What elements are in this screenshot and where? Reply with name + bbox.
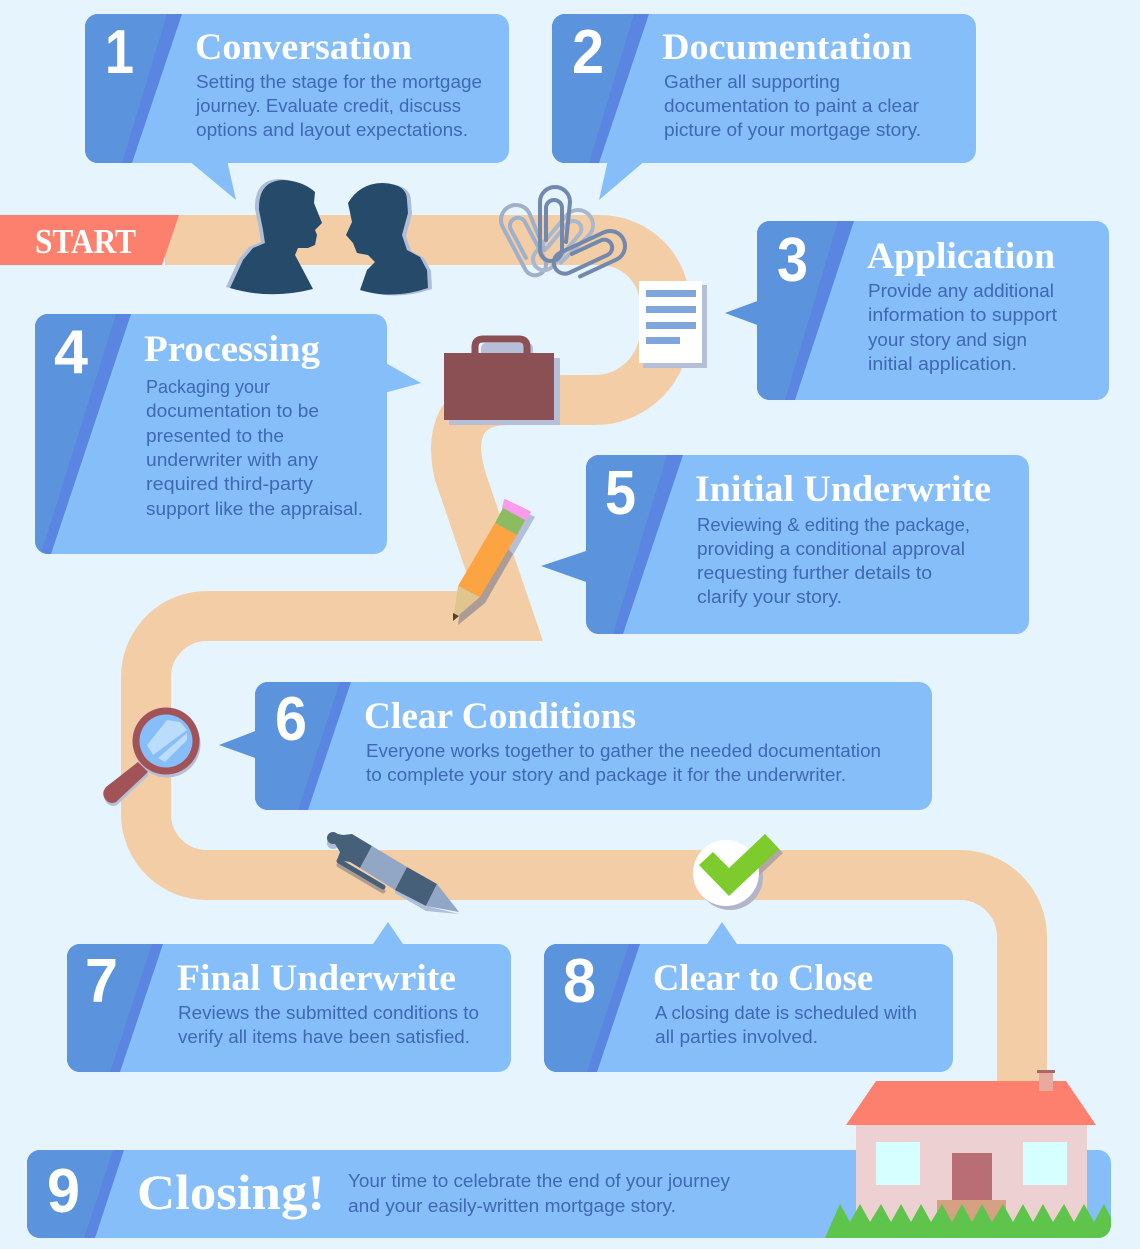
text: closing description xyxy=(348,1170,731,1216)
text: documentation description: documentation to paint a clear xyxy=(664,95,919,116)
journey path xyxy=(146,240,1022,1095)
text: clear conditions description: to complete your story and package it for the underwriter. xyxy=(366,764,846,785)
icon: pencil xyxy=(453,500,535,625)
text: clear conditions description: Everyone works together to gather the needed documentation xyxy=(366,740,881,761)
number 2: 2 xyxy=(572,18,604,87)
text: clear to close description: A closing date is scheduled with xyxy=(655,1002,917,1023)
text: conversation description: options and layout expectations. xyxy=(196,119,468,140)
text: application description: initial application. xyxy=(868,353,1017,374)
text: documentation description: picture of your mortgage story. xyxy=(664,119,921,140)
icon: house xyxy=(825,1070,1111,1238)
grass xyxy=(825,1204,1111,1238)
text: closing description: and your easily-written mortgage story. xyxy=(348,1195,676,1216)
text: conversation description: Setting the stage for the mortgage xyxy=(196,71,482,92)
panel: step 1 conversation xyxy=(85,14,509,200)
text: final underwrite description: verify all items have been satisfied. xyxy=(178,1026,470,1047)
number 7: 7 xyxy=(85,947,118,1016)
icon: briefcase xyxy=(444,339,560,425)
text: application description: your story and sign xyxy=(868,329,1027,350)
text: processing description xyxy=(146,376,363,519)
icon: two people in conversation xyxy=(226,179,432,296)
panel: step 3 application xyxy=(725,221,1109,400)
panel: step 5 initial underwrite xyxy=(541,455,1029,634)
icon: magnifying glass xyxy=(103,708,200,806)
icon: check mark xyxy=(693,834,783,910)
text: initial underwrite description: providing a conditional approval xyxy=(697,538,965,559)
text: clear to close description: all parties involved. xyxy=(655,1026,818,1047)
panel: step 6 clear conditions xyxy=(219,682,932,810)
start label: START xyxy=(35,222,136,261)
text: documentation description: Gather all supporting xyxy=(664,71,840,92)
number 1: 1 xyxy=(105,18,134,87)
heading: processing: Processing xyxy=(144,329,321,370)
text: final underwrite description xyxy=(178,1002,479,1047)
text: processing description: required third-party xyxy=(146,473,314,494)
number 9: 9 xyxy=(47,1157,80,1226)
heading: application: Application xyxy=(867,236,1055,277)
panel: step 7 final underwrite xyxy=(67,922,511,1072)
text: initial underwrite description: Reviewing & editing the package, xyxy=(697,514,970,535)
number 5: 5 xyxy=(605,459,636,528)
panel: step 8 clear to close xyxy=(544,922,953,1072)
text: application description xyxy=(868,280,1057,374)
panel: step 4 processing xyxy=(35,314,421,554)
text: initial underwrite description: clarify your story. xyxy=(697,586,842,607)
text: processing description: support like the appraisal. xyxy=(146,498,363,519)
icon: pen xyxy=(327,832,459,914)
text: initial underwrite description: requesting further details to xyxy=(697,562,932,583)
text: closing description: Your time to celebrate the end of your journey xyxy=(348,1170,731,1191)
number 4: 4 xyxy=(54,318,89,387)
text: application description: information to support xyxy=(868,304,1057,325)
start label xyxy=(0,215,179,265)
heading: initial underwrite: Initial Underwrite xyxy=(695,469,991,510)
heading: documentation: Documentation xyxy=(662,27,912,68)
text: processing description: underwriter with any xyxy=(146,449,319,470)
icon: paperclips xyxy=(496,187,630,285)
number 6: 6 xyxy=(275,685,307,754)
text: conversation description xyxy=(195,71,482,140)
heading: closing: Closing! xyxy=(137,1164,325,1220)
text: processing description: documentation to be xyxy=(146,400,319,421)
text: clear conditions description xyxy=(366,740,881,785)
number 3: 3 xyxy=(777,226,808,295)
heading: conversation: Conversation xyxy=(195,27,412,68)
icon: document xyxy=(639,281,707,368)
heading: final underwrite: Final Underwrite xyxy=(177,958,456,999)
text: conversation description: journey. Evaluate credit, discuss xyxy=(195,95,461,116)
heading: clear conditions: Clear Conditions xyxy=(364,696,636,737)
text: processing description: Packaging your xyxy=(146,376,270,397)
text: application description: Provide any additional xyxy=(868,280,1054,301)
text: initial underwrite description xyxy=(697,514,970,607)
text: processing description: presented to the xyxy=(146,425,284,446)
number 8: 8 xyxy=(563,947,596,1016)
panel: step 9 closing xyxy=(27,1150,1111,1238)
panel: step 2 documentation xyxy=(552,14,976,200)
text: clear to close description xyxy=(655,1002,917,1047)
heading: clear to close: Clear to Close xyxy=(653,958,873,999)
text: documentation description xyxy=(664,71,921,140)
text: final underwrite description: Reviews the submitted conditions to xyxy=(178,1002,479,1023)
